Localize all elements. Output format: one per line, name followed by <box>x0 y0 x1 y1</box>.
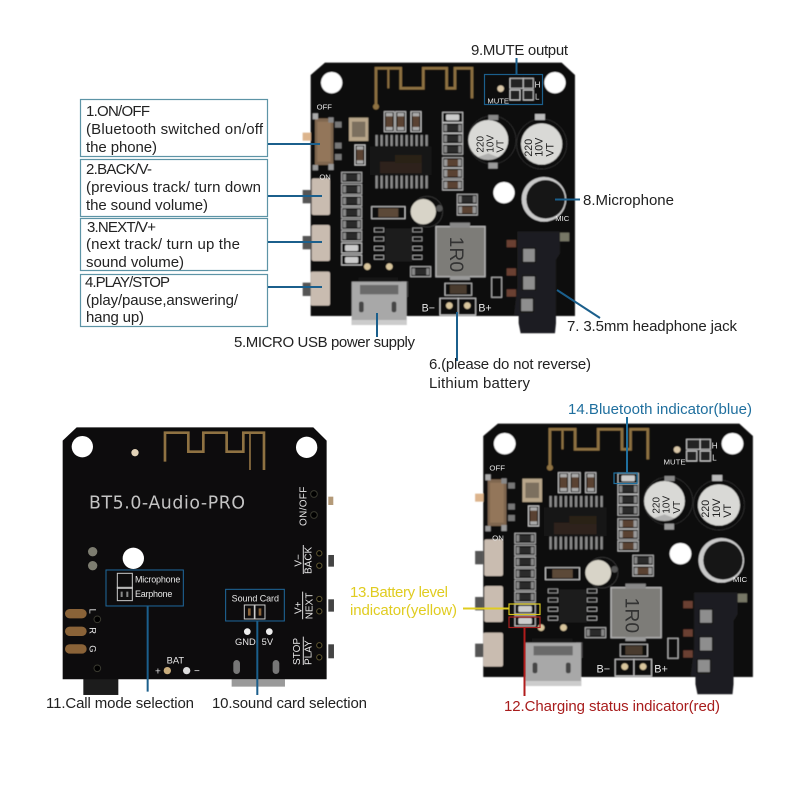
board markings: MIC <box>733 575 748 584</box>
board markings: L <box>535 92 540 101</box>
board markings: ON <box>492 533 504 542</box>
board markings: 10V <box>662 496 673 514</box>
board markings: 220 <box>651 497 662 514</box>
callout box 3: NEXT: (next track/ turn up the <box>86 236 240 253</box>
callout box 1: ON/OFF <box>80 100 268 156</box>
board markings: ON <box>319 172 331 181</box>
board markings <box>317 81 570 315</box>
board markings: OFF <box>489 463 505 472</box>
label: 13 Battery level indicator: 13.Battery level <box>350 584 448 601</box>
board markings: 10V <box>534 137 546 157</box>
board markings: VT <box>495 140 506 153</box>
callout box 2: BACK <box>80 160 268 216</box>
board markings: VT <box>722 504 734 518</box>
panel: bottom-left board, rear view: PLAY <box>304 640 315 665</box>
panel: bottom-left board, rear view: − <box>194 666 200 677</box>
label: 9 MUTE output: 9.MUTE output <box>471 42 569 59</box>
callout box 4: PLAY/STOP: 4.PLAY/STOP <box>85 274 170 291</box>
callout box 2: BACK: 2.BACK/V- <box>86 161 152 178</box>
panel: bottom-left board, rear view: V− <box>294 554 305 567</box>
board markings: OFF <box>317 102 332 111</box>
callout box 3: NEXT: sound volume) <box>86 254 184 271</box>
board markings: VT <box>672 501 683 514</box>
callout box 3: NEXT: 3.NEXT/V+ <box>87 219 156 236</box>
panel: bottom-left board, rear view <box>63 427 334 695</box>
panel: bottom-left board, rear view: BT5.0-Audio-PRO <box>89 493 245 513</box>
label: 12 Charging status indicator <box>504 617 720 715</box>
callout box 3: NEXT <box>80 218 268 271</box>
board markings: 10V <box>485 135 496 153</box>
board markings: MUTE <box>663 457 686 466</box>
board markings: 220 <box>700 500 712 518</box>
panel: bottom-left board, rear view: BACK <box>304 546 315 574</box>
board markings: H <box>712 442 718 451</box>
callout box 4: PLAY/STOP: (play/pause,answering/ <box>86 292 239 309</box>
panel: bottom-left board, rear view: Sound Card <box>232 594 279 604</box>
board markings: 10V <box>711 498 723 518</box>
callout box 4: PLAY/STOP: hang up) <box>86 309 144 326</box>
panel: bottom-right board, indicators <box>475 424 753 694</box>
panel: bottom-left board, rear view: G <box>87 645 97 653</box>
callout box 1: ON/OFF: (Bluetooth switched on/off <box>86 121 264 138</box>
label: 7 headphone jack: 7. 3.5mm headphone jack <box>567 318 738 335</box>
board markings: MIC <box>555 214 570 223</box>
label: 6 Lithium battery: 6.(please do not reverse) <box>429 356 591 373</box>
callout box 1: ON/OFF: the phone) <box>86 139 157 156</box>
panel: bottom-left board, rear view: V+ <box>294 601 305 614</box>
board markings: 220 <box>523 139 535 157</box>
board markings: MUTE <box>487 96 509 105</box>
panel: bottom-left board, rear view: Microphone <box>135 575 180 585</box>
board markings <box>489 442 748 676</box>
label: 6 Lithium battery <box>429 312 591 392</box>
panel: bottom-left board, rear view: + <box>155 666 161 677</box>
label: 10 sound card selection: 10.sound card selection <box>212 695 367 712</box>
arrows: callout leader lines <box>268 144 322 287</box>
label: 14 Bluetooth indicator <box>568 401 752 484</box>
board markings: 1R0 <box>620 598 643 633</box>
panel: bottom-left board, rear view: 5V <box>262 637 274 647</box>
label: 13 Battery level indicator: indicator(yellow) <box>350 602 457 619</box>
board markings: B+ <box>478 303 492 315</box>
label: 9 MUTE output <box>471 42 569 104</box>
panel: bottom-left board, rear view: BAT <box>167 655 184 665</box>
label: 14 Bluetooth indicator: 14.Bluetooth indicator(blue) <box>568 401 752 418</box>
label: 7 headphone jack <box>557 290 738 335</box>
label: 8 Microphone: 8.Microphone <box>583 192 674 209</box>
board markings: B− <box>597 664 610 676</box>
callout box 2: BACK: (previous track/ turn down <box>86 179 261 196</box>
callout box 4: PLAY/STOP <box>80 274 268 326</box>
board markings: B+ <box>654 664 668 676</box>
panel: bottom-left board, rear view: NEXT <box>304 593 315 619</box>
board markings: L <box>712 453 717 462</box>
panel: bottom-left board, rear view: GND <box>235 637 256 647</box>
board markings: B− <box>422 303 435 315</box>
board markings: 220 <box>475 136 486 153</box>
callout box 1: ON/OFF: 1.ON/OFF <box>86 103 150 120</box>
panel: bottom-left board, rear view: R <box>87 627 97 634</box>
board markings: VT <box>544 143 556 157</box>
label: 6 Lithium battery: Lithium battery <box>429 375 530 392</box>
panel: bottom-left board, rear view: ON/OFF <box>299 487 310 526</box>
panel: bottom-left board, rear view: L <box>87 609 97 614</box>
callout box 2: BACK: the sound volume) <box>86 197 208 214</box>
panel: bottom-left board, rear view: STOP <box>292 638 303 665</box>
board markings: H <box>535 81 541 90</box>
panel: bottom-left board, rear view: Earphone <box>135 589 172 599</box>
label: 5 Micro USB: 5.MICRO USB power supply <box>234 334 416 351</box>
label: 13 Battery level indicator <box>350 584 540 619</box>
label: 12 Charging status indicator: 12.Charging status indicator(red) <box>504 698 720 715</box>
label: 11 Call mode selection: 11.Call mode selection <box>46 695 194 712</box>
board markings: 1R0 <box>445 237 466 272</box>
panel: top board, front view <box>303 63 575 333</box>
